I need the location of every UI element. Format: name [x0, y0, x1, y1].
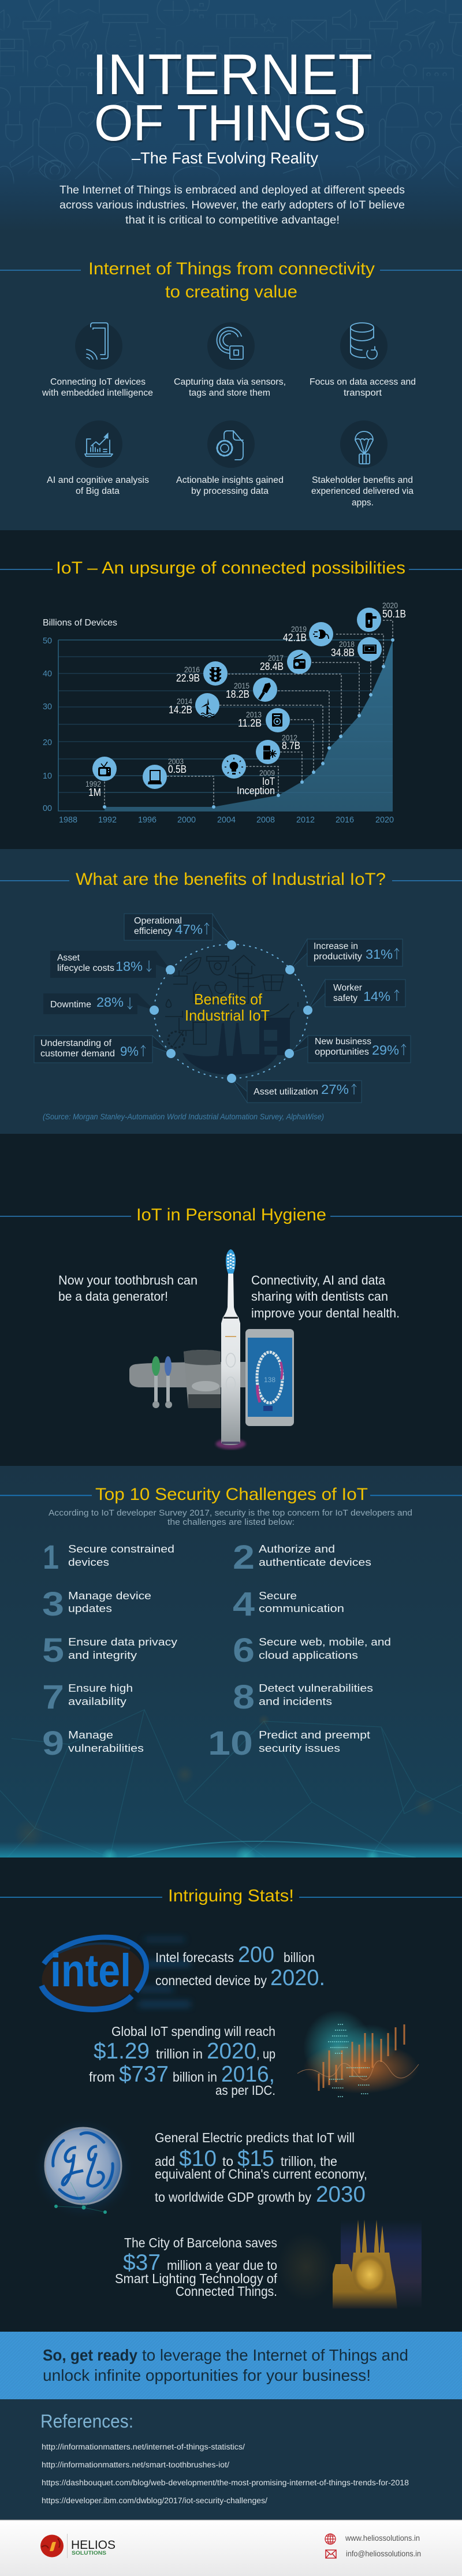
marker: 2012 fridge [256, 733, 300, 764]
marker: 1992 TV: 1992 [85, 779, 101, 788]
stat: intel: billion [284, 1950, 315, 1965]
marker: 2018 tablet [331, 637, 382, 661]
step: actionable insights: by processing data [191, 486, 269, 496]
step: stakeholder benefits: experienced delivered via [311, 486, 413, 496]
subtitle: –The Fast Evolving Reality [132, 149, 318, 167]
step: connecting devices [42, 322, 153, 398]
step: data access [310, 322, 416, 398]
callout: productivity: Increase in [314, 941, 358, 951]
stat: global spending: trillion in [156, 2046, 203, 2061]
spare brush heads [152, 1356, 172, 1408]
panel: call to action: unlock infinite opportunities for your business! [43, 2366, 371, 2384]
stat: global spending: , up [256, 2046, 275, 2061]
logo: HELIOS [71, 2538, 116, 2552]
stat: general electric: to [222, 2154, 233, 2169]
stat: global spending: from [89, 2069, 115, 2084]
callout: new business [285, 1036, 411, 1063]
axis labels: 50 [43, 636, 52, 646]
illustration: toothbrush set [129, 1249, 294, 1449]
centre title: Industrial IoT [185, 1007, 270, 1024]
stat: general electric: to worldwide GDP growth by [155, 2190, 311, 2205]
area series [105, 640, 393, 811]
axis labels: 2000 [177, 815, 196, 825]
stat: general electric: trillion, the [281, 2154, 337, 2169]
callout: operational efficiency: 47% [175, 922, 203, 937]
stat: general electric: add [155, 2154, 175, 2169]
callout: worker safety [303, 980, 405, 1015]
item 5 [42, 1632, 178, 1669]
stat: general electric: $10 [179, 2146, 217, 2171]
step: AI analysis: AI and cognitive analysis [47, 475, 149, 485]
phone: 138 [264, 1376, 275, 1384]
step: capturing data [174, 322, 286, 398]
item 8: Detect vulnerabilities [259, 1682, 373, 1694]
item 7 [42, 1678, 133, 1716]
callout: operational efficiency: efficiency [134, 926, 172, 936]
callout: productivity: productivity [314, 952, 362, 962]
item 6: cloud applications [259, 1649, 358, 1661]
heading [0, 259, 462, 301]
item 10: Predict and preempt [259, 1729, 370, 1741]
text: right: Connectivity, AI and data [251, 1273, 386, 1287]
panel: references: https://developer.ibm.com/dwblog/2017/iot-security-challenges/ [42, 2496, 267, 2505]
axis labels: 00 [43, 803, 52, 813]
centre title: Benefits of [194, 991, 263, 1008]
contact: website [325, 2533, 420, 2544]
marker: 2003 laptop [143, 757, 187, 789]
brush body [216, 1249, 246, 1449]
axis labels: 40 [43, 669, 52, 679]
axis labels: 2004 [217, 815, 236, 825]
centre graphic [165, 955, 298, 1075]
marker: 2014 wind turbine [169, 693, 219, 717]
callout: understanding demand: 9% [120, 1044, 139, 1059]
stat: barcelona: The City of Barcelona saves [124, 2235, 277, 2250]
item 7: availability [68, 1695, 127, 1707]
title: INTERNET [92, 42, 372, 106]
callout: worker safety: Worker [333, 983, 362, 993]
intro paragraph: that it is critical to competitive advantage! [125, 214, 340, 226]
marker: 2013 washer [238, 708, 290, 732]
axis labels: 10 [43, 771, 52, 781]
intro: According to IoT developer Survey 2017, security is the top concern for IoT developers and [49, 1508, 412, 1518]
item 3: 3 [42, 1585, 64, 1623]
stat: barcelona: $37 [123, 2250, 161, 2275]
image: intel logo: intel [50, 1945, 131, 1996]
text: right: sharing with dentists can [251, 1289, 388, 1304]
marker: 2019 plug: 42.1B [283, 632, 307, 643]
callout: new business: opportunities [315, 1047, 369, 1057]
item 10: security issues [259, 1742, 340, 1754]
panel: call to action [0, 2332, 462, 2399]
item 10 [208, 1725, 370, 1762]
axis labels: 1988 [59, 815, 77, 825]
axis labels: 1996 [138, 815, 157, 825]
item 6: 6 [233, 1632, 255, 1669]
title: OF THINGS [94, 94, 366, 151]
marker: 2019 plug: 2019 [291, 624, 307, 634]
callout: worker safety: 14% [363, 989, 390, 1004]
marker: 1992 TV [85, 757, 117, 798]
callout: understanding demand [34, 1036, 176, 1063]
item 9: vulnerabilities [68, 1742, 144, 1754]
glass [184, 1350, 221, 1408]
item 1 [43, 1539, 174, 1576]
step: actionable insights [176, 420, 284, 496]
y axis title: Billions of Devices [43, 618, 117, 628]
item 10: 10 [208, 1725, 253, 1762]
axis labels [43, 636, 394, 825]
stat: global spending: $737 [119, 2062, 169, 2087]
marker: 2013 washer: 2013 [246, 710, 262, 719]
marker: 2003 laptop: 0.5B [168, 764, 187, 775]
axis labels: 30 [43, 702, 52, 712]
stat: global spending: Global IoT spending will reach [111, 2024, 275, 2039]
item 2: authenticate devices [259, 1556, 371, 1568]
intro paragraph: across various industries. However, the early adopters of IoT believe [59, 199, 405, 211]
intro paragraph: The Internet of Things is embraced and deployed at different speeds [59, 184, 405, 196]
item 4: 4 [233, 1585, 255, 1623]
callout: asset utilization: 27% [321, 1082, 349, 1097]
panel: security challenges [0, 1466, 462, 1867]
dashed leader lines [105, 620, 393, 807]
axis labels: 2012 [296, 815, 315, 825]
stat: intel: 2020. [270, 1965, 325, 1990]
stat: general electric: General Electric predicts that IoT will [155, 2130, 355, 2145]
step: stakeholder benefits: Stakeholder benefits and [312, 475, 413, 485]
callout: productivity: 31% [366, 947, 393, 962]
item 5: Ensure data privacy [68, 1636, 178, 1648]
panel: connectivity to value [0, 259, 462, 530]
intro paragraph [59, 184, 405, 226]
axis labels: 20 [43, 738, 52, 747]
step: AI analysis: of Big data [76, 486, 120, 496]
stat: general electric [155, 2130, 367, 2207]
axis labels: 1992 [98, 815, 117, 825]
item 2: 2 [233, 1539, 255, 1576]
step: capturing data: tags and store them [189, 388, 270, 398]
panel: intriguing stats [0, 1857, 462, 2332]
text: left [58, 1273, 198, 1304]
source note: (Source: Morgan Stanley-Automation World Industrial Automation Survey, AlphaWise) [43, 1112, 324, 1121]
marker: 2014 wind turbine: 2014 [177, 697, 192, 706]
stat: barcelona: Connected Things. [176, 2284, 277, 2299]
item 8: 8 [233, 1678, 255, 1716]
step: stakeholder benefits [311, 420, 413, 508]
contact: email: info@heliossolutions.in [346, 2549, 421, 2558]
item 3: updates [68, 1602, 112, 1614]
marker: 2016 traffic light [176, 661, 228, 686]
callout: downtime: Downtime [50, 1000, 91, 1010]
stat: general electric: equivalent of China's current economy, [155, 2166, 367, 2182]
travel case [129, 1362, 246, 1387]
panel: call to action: So, get ready [43, 2346, 137, 2364]
panel: references: References: [40, 2411, 133, 2432]
heading: IoT in Personal Hygiene [136, 1205, 326, 1224]
callout: operational efficiency [124, 914, 236, 950]
panel: call to action: to leverage the Internet of Things and [142, 2346, 408, 2364]
item 4: Secure [259, 1589, 297, 1602]
marker: 2015 hammer: 2015 [234, 681, 249, 690]
text: left: Now your toothbrush can [58, 1273, 198, 1287]
stat: global spending [89, 2024, 275, 2098]
marker: 2009 bulb: IoT [262, 776, 275, 787]
heading: to creating value [165, 282, 297, 301]
panel: references: http://informationmatters.net/internet-of-things-statistics/ [42, 2443, 245, 2451]
axis labels: 2008 [256, 815, 275, 825]
item 3: Manage device [68, 1589, 151, 1602]
intro [49, 1508, 412, 1527]
contact: website: www.heliossolutions.in [345, 2533, 420, 2543]
item 4: communication [259, 1602, 344, 1614]
marker: 2017 radio: 2017 [268, 653, 284, 662]
item 6: Secure web, mobile, and [259, 1636, 391, 1648]
callout: asset utilization: Asset utilization [254, 1087, 318, 1097]
heading: IoT – An upsurge of connected possibilities [56, 559, 405, 578]
marker: 2016 traffic light: 22.9B [176, 672, 200, 684]
marker: 2016 traffic light: 2016 [184, 665, 200, 674]
panel: footer [0, 2519, 462, 2576]
stat: intel: Intel forecasts [155, 1950, 234, 1965]
stat: barcelona: million a year due to [167, 2258, 277, 2273]
marker: 1992 TV: 1M [88, 787, 101, 798]
text: left: be a data generator! [58, 1289, 168, 1304]
chart: billions of devices [43, 601, 406, 825]
network background [0, 1710, 462, 1866]
step: capturing data: Capturing data via sensors, [174, 377, 286, 387]
marker: 2017 radio [260, 650, 311, 674]
item 1: 1 [43, 1539, 59, 1576]
marker: 2012 fridge: 2012 [282, 733, 297, 742]
item 9: 9 [42, 1725, 64, 1762]
step: connecting devices: with embedded intelligence [42, 388, 153, 398]
panel: personal hygiene [0, 1134, 462, 1466]
item 9: Manage [68, 1729, 113, 1741]
item 8: and incidents [259, 1695, 332, 1707]
item 5: 5 [42, 1632, 64, 1669]
marker: 2018 tablet: 34.8B [331, 647, 355, 658]
panel: header [0, 0, 462, 289]
title [92, 42, 372, 151]
item 2 [233, 1539, 371, 1576]
stat: global spending: $1.29 [94, 2039, 150, 2064]
marker: 2014 wind turbine: 14.2B [169, 704, 192, 716]
item 1: Secure constrained [68, 1543, 174, 1555]
callout: worker safety: safety [333, 993, 357, 1003]
heading: What are the benefits of Industrial IoT? [76, 870, 386, 889]
panel: upsurge chart [0, 530, 462, 849]
marker: 2020 door lock: 2020 [382, 601, 398, 610]
callout: asset lifecycle costs: lifecycle costs [57, 963, 114, 973]
item 8 [233, 1678, 373, 1716]
marker: 2015 hammer: 18.2B [226, 688, 249, 700]
text: right [251, 1273, 400, 1320]
panel: references: http://informationmatters.net/smart-toothbrushes-iot/ [42, 2460, 229, 2469]
marker: 2020 door lock [357, 601, 406, 632]
marker: 2020 door lock: 50.1B [382, 608, 406, 620]
marker: 2013 washer: 11.2B [238, 717, 262, 729]
item 9 [42, 1725, 144, 1762]
panel: references: https://dashbouquet.com/blog/web-development/the-most-promising-internet-of-things-trends-for-2018 [42, 2478, 409, 2487]
marker: 2003 laptop: 2003 [168, 757, 184, 766]
stat: general electric: $15 [237, 2146, 274, 2171]
centre title [185, 991, 270, 1024]
callout: asset lifecycle costs [50, 951, 175, 978]
step: data access: transport [344, 388, 382, 398]
phone [245, 1329, 294, 1426]
heading: Top 10 Security Challenges of IoT [95, 1485, 368, 1504]
logo: SOLUTIONS [72, 2550, 106, 2556]
dotted ring [154, 944, 308, 1078]
step: data access: Focus on data access and [310, 377, 416, 387]
image: barcelona cathedral [277, 2220, 422, 2309]
item 1: devices [68, 1556, 109, 1568]
step: actionable insights: Actionable insights gained [176, 475, 284, 485]
data points [103, 638, 394, 809]
stat: general electric: 2030 [316, 2182, 366, 2207]
stat: intel: 200 [238, 1942, 274, 1967]
intro: the challenges are listed below: [167, 1517, 295, 1527]
marker: 2009 bulb [222, 754, 275, 796]
heading: Internet of Things from connectivity [88, 259, 375, 278]
background icon pattern [0, 0, 462, 192]
stat: global spending: 2020 [207, 2039, 256, 2064]
callout: asset utilization [227, 1074, 362, 1103]
axis labels: 2016 [336, 815, 354, 825]
marker: 2015 hammer [226, 677, 277, 702]
item 4 [233, 1585, 344, 1623]
axis labels: 2020 [375, 815, 394, 825]
text: right: improve your dental health. [251, 1306, 400, 1320]
stat: intel: connected device by [155, 1973, 267, 1988]
callout: asset lifecycle costs: Asset [57, 953, 80, 963]
step: stakeholder benefits: apps. [352, 498, 374, 508]
marker: 2017 radio: 28.4B [260, 661, 284, 672]
step: connecting devices: Connecting IoT devices [50, 377, 146, 387]
stat: global spending: billion in [173, 2069, 217, 2084]
callout: downtime [43, 993, 159, 1015]
panel: references [0, 2399, 462, 2520]
stat: barcelona: Smart Lighting Technology of [115, 2271, 278, 2286]
stat: barcelona [115, 2235, 278, 2299]
heading: Intriguing Stats! [168, 1886, 294, 1905]
callout: understanding demand: Understanding of [40, 1038, 112, 1048]
stat: global spending: as per IDC. [215, 2083, 275, 2098]
callout: productivity [285, 939, 403, 974]
callout: downtime: 28% [96, 995, 124, 1010]
panel: industrial IoT benefits [0, 849, 462, 1134]
item 7: Ensure high [68, 1682, 133, 1694]
callout: asset lifecycle costs: 18% [116, 959, 143, 974]
image: intel logo [38, 1937, 191, 2014]
marker: 2009 bulb: 2009 [259, 768, 275, 777]
item 3 [42, 1585, 151, 1623]
item 7: 7 [42, 1678, 64, 1716]
item 5: and integrity [68, 1649, 137, 1661]
marker: 2019 plug [283, 622, 333, 646]
stat: intel [155, 1942, 325, 1990]
image: GE logo [31, 2117, 135, 2221]
marker: 2018 tablet: 2018 [339, 639, 355, 649]
image: world map chart [297, 2010, 419, 2097]
item 2: Authorize and [259, 1543, 335, 1555]
marker: 2009 bulb: Inception [237, 785, 275, 796]
callout: understanding demand: customer demand [40, 1049, 115, 1059]
marker: 2012 fridge: 8.7B [282, 740, 300, 751]
callout: operational efficiency: Operational [134, 916, 182, 926]
stat: global spending: 2016, [221, 2062, 275, 2087]
step: AI analysis [47, 420, 149, 496]
logo [40, 2534, 116, 2558]
item 6 [233, 1632, 391, 1669]
callout: new business: New business [315, 1037, 371, 1047]
callout: new business: 29% [372, 1043, 399, 1058]
